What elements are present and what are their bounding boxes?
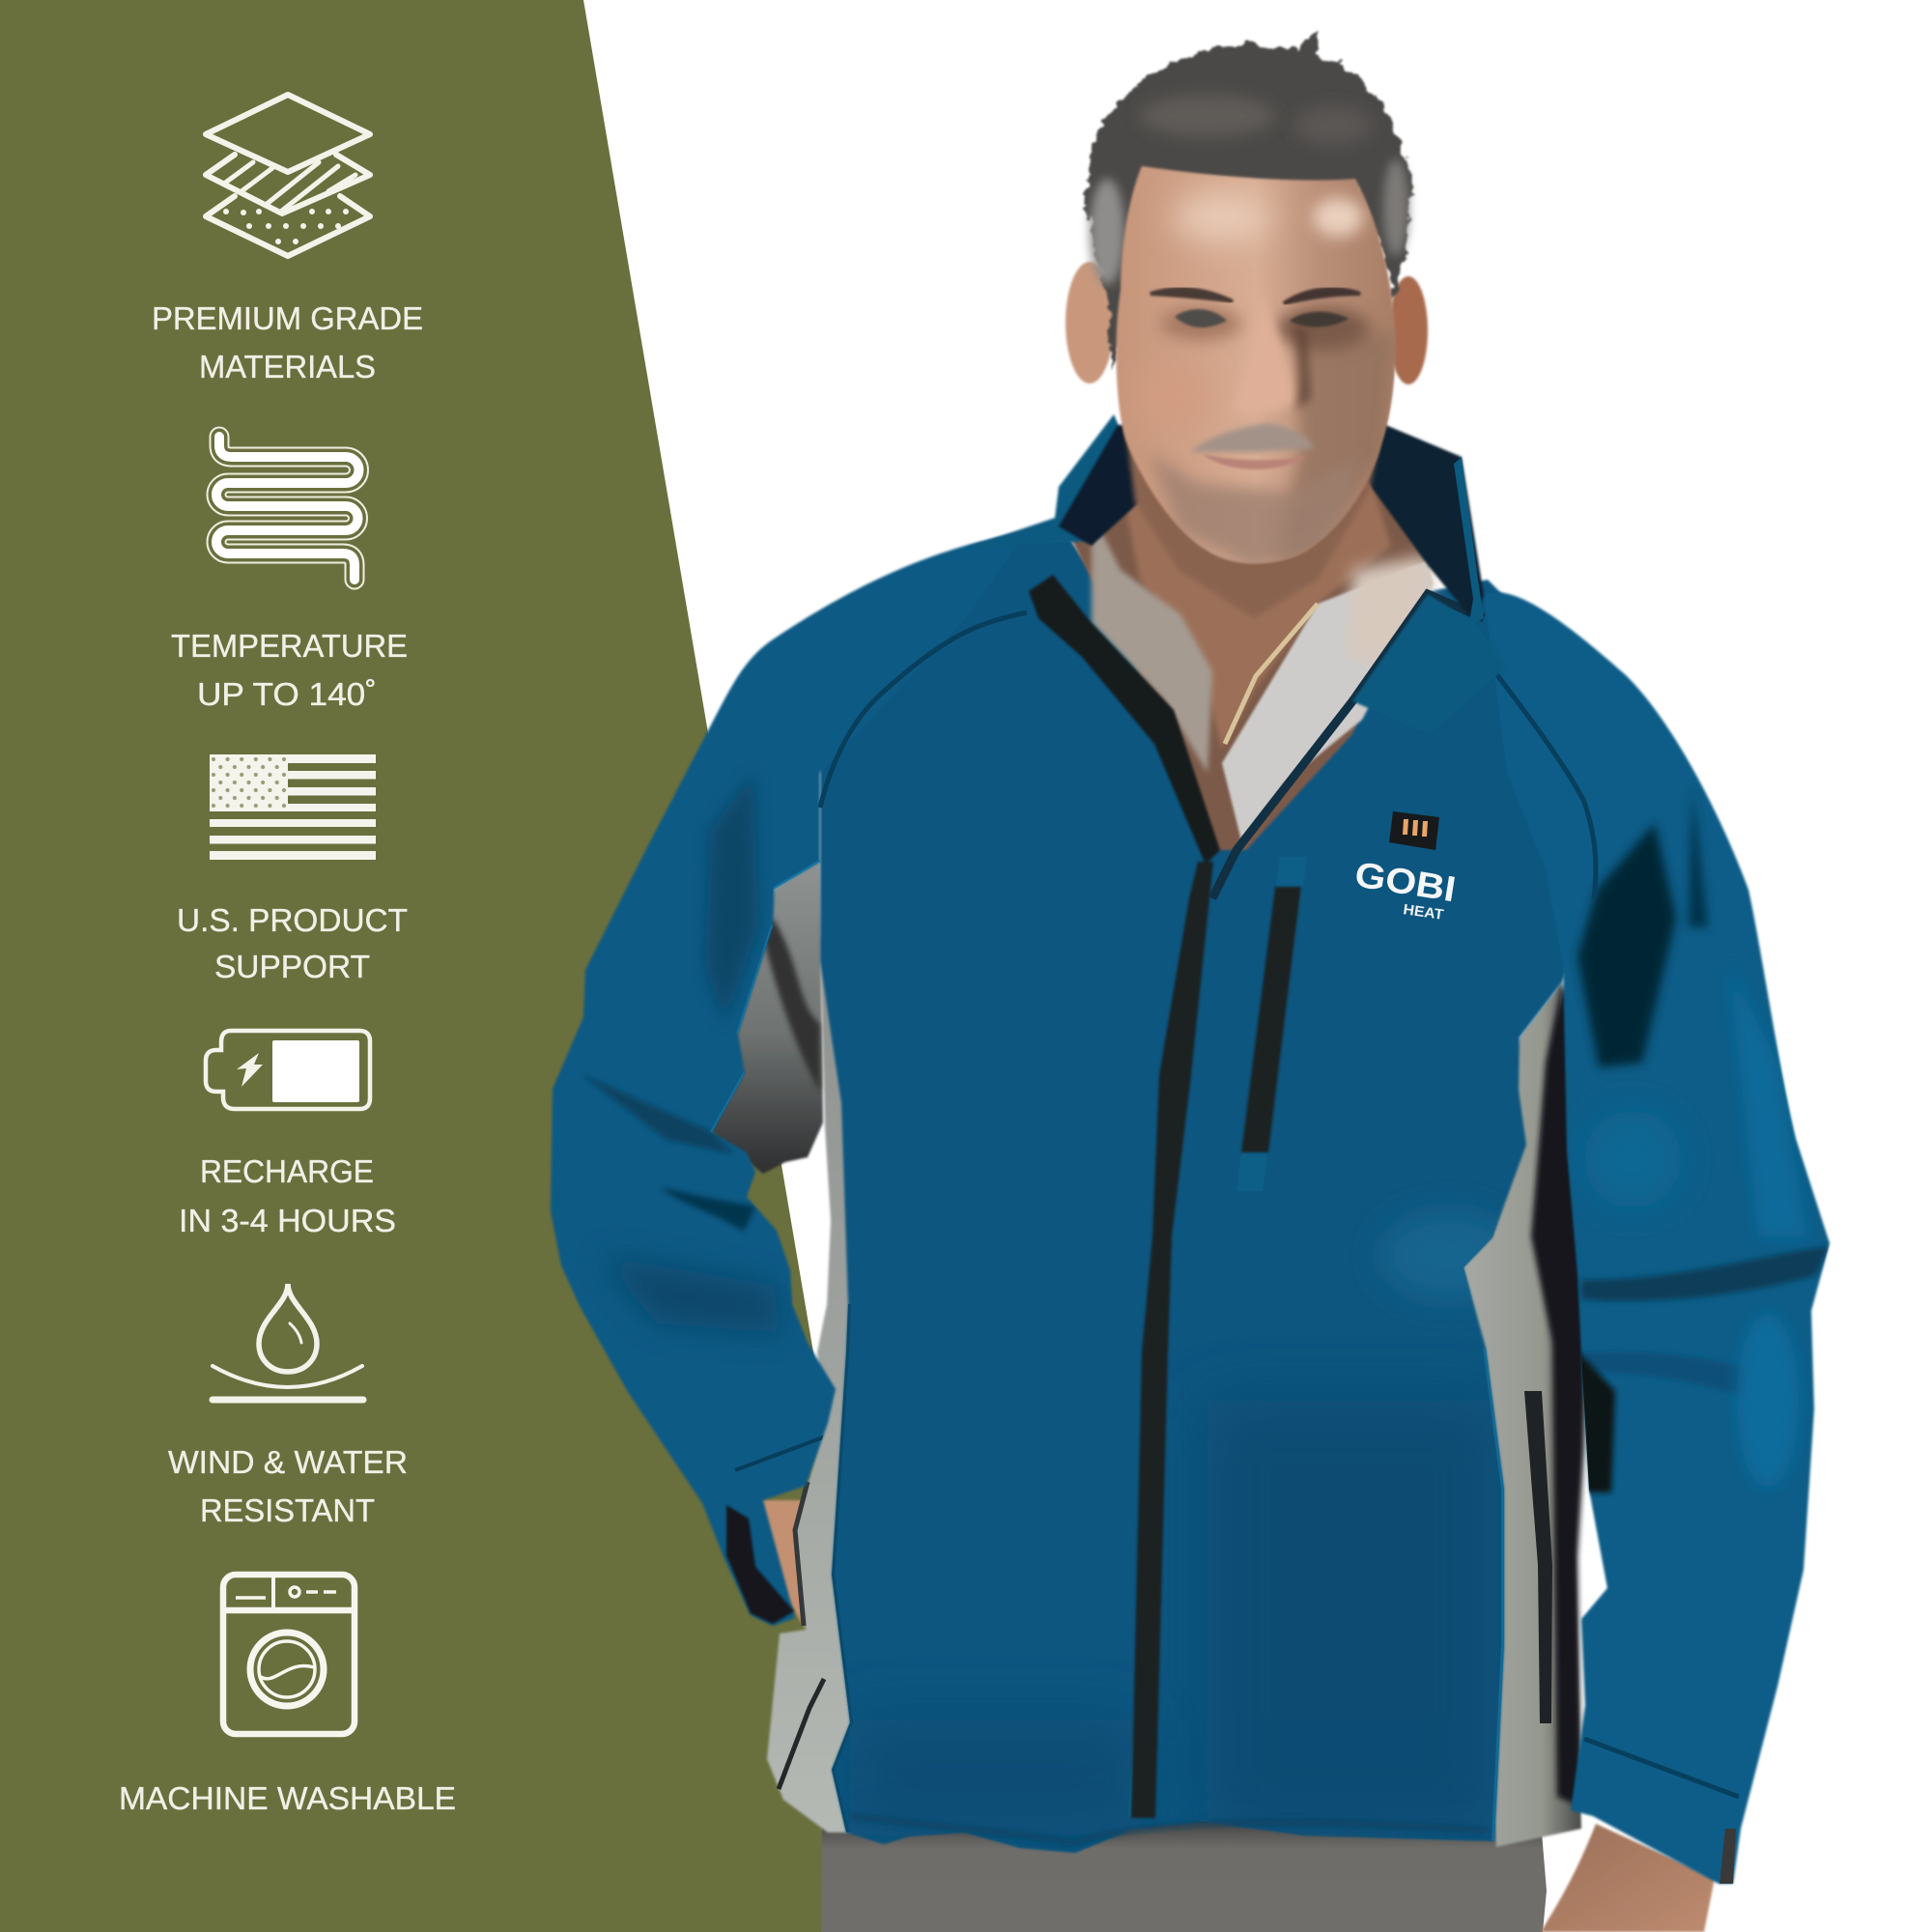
nose [1232,290,1294,412]
right knit shirt [1222,560,1434,840]
neck [1125,425,1381,618]
stubble [1150,456,1350,563]
logo: Gobi Heat: GOBI [1352,854,1459,909]
text: recharge in 3-4 hours [179,1154,396,1239]
panel: green feature column [0,0,912,1932]
eyes [1175,309,1227,327]
chest pocket zipper [1241,887,1301,1152]
shadow side of face [1275,333,1395,565]
shirt and chest [1029,474,1484,898]
text: us product support [177,903,408,985]
right sleeve [1463,592,1830,1884]
side strip grey left [767,937,869,1833]
underarm grey panel left [712,860,823,1174]
jacket collar [966,414,1507,734]
right grey side panel [1449,982,1581,1847]
right cuff tab [1719,1829,1736,1884]
ears [1065,262,1114,384]
jacket torso [820,522,1623,1853]
upper zipper right placket [1212,594,1484,898]
raglan seam right [1463,633,1596,898]
photo: man wearing heated jacket [551,32,1830,1932]
forehead highlight [1174,192,1270,242]
right dark underarm band [1531,982,1610,1806]
hair lighter strands [1140,95,1275,137]
left cuff black lining [726,1505,794,1624]
mouth [1203,454,1306,469]
text: wind and water resistant: WIND & WATER [168,1445,408,1481]
text: recharge in 3-4 hours: IN 3-4 HOURS [179,1204,396,1239]
jacket inner black left front [1029,575,1220,865]
left shirt collar [1092,512,1212,773]
head [1065,32,1428,618]
icon: washing machine [223,1575,355,1734]
icon: battery charging [206,1031,370,1109]
moustache [1190,423,1314,452]
face [1116,166,1395,563]
hem fold shadow [850,1816,1488,1843]
logo: Gobi Heat: HEAT [1402,901,1444,923]
raglan seam left [820,612,1027,808]
eyebrows [1151,289,1233,301]
text: temperature up to 140: UP TO 140˚ [197,677,377,713]
text: recharge in 3-4 hours: RECHARGE [200,1154,374,1190]
shirt zipper [1225,604,1318,744]
trousers [821,1821,1547,1932]
right side pocket zipper [1524,1391,1552,1723]
icon: material layers [206,95,370,256]
text: premium grade materials [152,301,423,385]
center zipper [1131,862,1213,1818]
grey temples [1090,179,1124,285]
icon: heating coil [216,437,359,580]
left hand in pocket [753,1500,805,1629]
right hand [1541,1824,1715,1932]
chest pocket flap [1236,857,1307,1191]
eye sockets [1160,306,1241,341]
text: temperature up to 140 [171,629,408,713]
icon: water drop on surface [213,1284,363,1400]
text: premium grade materials: MATERIALS [199,350,376,385]
text: premium grade materials: PREMIUM GRADE [152,301,423,337]
text: wind and water resistant [168,1445,408,1529]
underarm dark folds left [763,918,820,1092]
text: machine washable: MACHINE WASHABLE [119,1781,456,1817]
text: us product support: U.S. PRODUCT [177,903,408,939]
pocket edge line [795,1482,808,1626]
left sleeve [551,531,1027,1626]
text: temperature up to 140: TEMPERATURE [171,629,408,665]
heat control button [1389,811,1439,850]
placket seam [1130,918,1201,1816]
text: wind and water resistant: RESISTANT [200,1493,375,1529]
text: us product support: SUPPORT [214,950,370,985]
hair [1086,32,1411,371]
icon: american flag [210,754,376,860]
pocket zipper lower left [779,1679,824,1789]
cheek colour [1140,362,1208,430]
